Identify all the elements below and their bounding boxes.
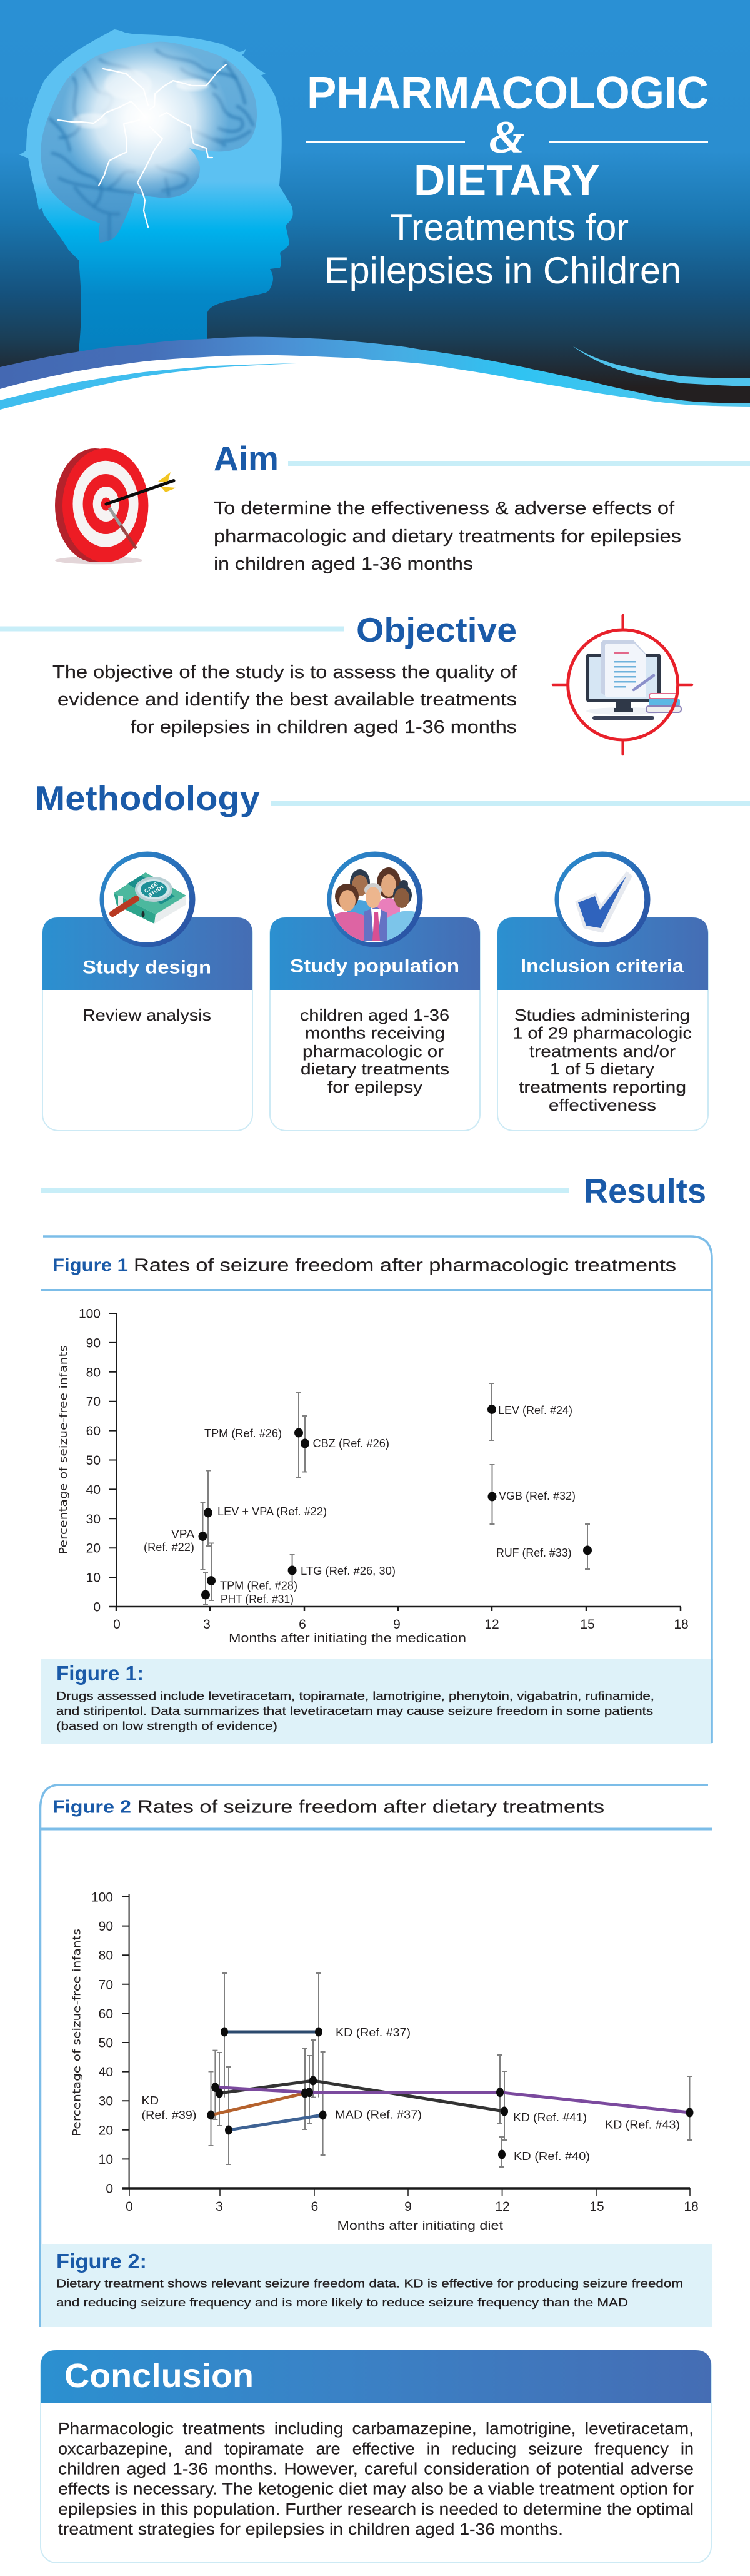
text: study population description: pharmacologic or — [302, 1042, 444, 1061]
panel: inclusion criteria card — [498, 852, 708, 1131]
chart: seizure freedom after dietary treatments: 15 — [589, 2200, 604, 2214]
title: DIETARY — [414, 156, 600, 205]
text: study population description: months receiving — [305, 1024, 445, 1043]
chart: seizure freedom after pharmacologic treatments: VGB (Ref. #32) — [499, 1490, 576, 1502]
chart: seizure freedom after pharmacologic treatments: 15 — [580, 1617, 595, 1632]
chart: seizure freedom after dietary treatments: Months after initiating diet — [338, 2220, 504, 2233]
chart: seizure freedom after dietary treatments: 6 — [311, 2200, 318, 2214]
chart: seizure freedom after dietary treatments: 0 — [106, 2181, 113, 2196]
callout: figure 2 summary — [41, 2244, 712, 2327]
callout: figure 1 summary: Drugs assessed include levetiracetam, topiramate, lamotrigine, phenytoin, vigabatrin, rufinamide, — [56, 1689, 654, 1702]
chart: seizure freedom after pharmacologic treatments: 10 — [86, 1571, 101, 1585]
text: objective description: The objective of the study is to assess the quality of — [52, 662, 518, 682]
text: study population description: for epilepsy — [328, 1078, 422, 1096]
icon: case study book and magnifier — [100, 852, 195, 947]
panel: figure 1 — [41, 1236, 713, 1744]
icon: lightning bolts — [58, 64, 226, 227]
panel: aim — [55, 439, 750, 574]
heading: figure 1 title: Figure 1 — [52, 1256, 128, 1276]
title: PHARMACOLOGIC — [307, 68, 709, 118]
text: inclusion criteria description: effectiveness — [549, 1096, 656, 1114]
chart: seizure freedom after pharmacologic treatments: 50 — [86, 1453, 101, 1468]
callout: figure 1 summary: Figure 1: — [56, 1662, 144, 1685]
chart: seizure freedom after dietary treatments: KD — [141, 2094, 159, 2107]
text: inclusion criteria description: 1 of 5 dietary — [550, 1059, 654, 1078]
text: inclusion criteria description: 1 of 29 pharmacologic — [512, 1024, 692, 1043]
panel: objective — [0, 610, 692, 754]
chart: seizure freedom after dietary treatments: 100 — [91, 1890, 113, 1905]
title: & — [489, 112, 525, 163]
header banner background — [0, 0, 750, 413]
icon: case study book and magnifier: STUDY — [147, 883, 166, 898]
icon: case study book and magnifier: CASE — [143, 881, 159, 894]
text: inclusion criteria description: treatments and/or — [529, 1042, 676, 1061]
text: objective description — [52, 662, 518, 737]
chart: seizure freedom after dietary treatments: KD (Ref. #40) — [514, 2150, 590, 2163]
panel: conclusion — [41, 2350, 711, 2563]
text: inclusion criteria description: treatments reporting — [519, 1078, 686, 1096]
chart: seizure freedom after dietary treatments: 10 — [99, 2153, 113, 2167]
chart: seizure freedom after dietary treatments: 80 — [99, 1949, 113, 1963]
chart: seizure freedom after pharmacologic treatments: Percentage of seizue-free infants — [58, 1345, 70, 1555]
text: conclusion body: oxcarbazepine, and topiramate are effective in reducing seizure frequency in — [58, 2440, 694, 2458]
chart: seizure freedom after pharmacologic treatments: PHT (Ref. #31) — [221, 1593, 294, 1605]
chart: seizure freedom after pharmacologic treatments: 12 — [484, 1617, 499, 1632]
chart: seizure freedom after dietary treatments: 60 — [99, 2007, 113, 2021]
text: aim description: pharmacologic and dietary treatments for epilepsies — [214, 527, 681, 547]
text: conclusion body: children aged 1-36 months. However, careful consideration of potential adverse — [58, 2460, 694, 2478]
text: study population description — [300, 1006, 449, 1096]
chart: seizure freedom after pharmacologic treatments: LEV (Ref. #24) — [498, 1404, 572, 1417]
text: conclusion body: effects is necessary. The ketogenic diet may also be a viable treatment option for — [58, 2481, 694, 2498]
chart: seizure freedom after dietary treatments — [71, 1890, 699, 2233]
title: Treatments for — [390, 206, 629, 248]
chart: seizure freedom after dietary treatments: 3 — [216, 2200, 223, 2214]
text: study population description: dietary treatments — [301, 1059, 449, 1078]
chart: seizure freedom after pharmacologic treatments: 60 — [86, 1424, 101, 1438]
chart: seizure freedom after pharmacologic treatments: TPM (Ref. #28) — [220, 1580, 298, 1592]
chart: seizure freedom after dietary treatments: 40 — [99, 2065, 113, 2079]
chart: seizure freedom after dietary treatments: Percentage of seizue-free infants — [71, 1929, 84, 2136]
heading: study population: Study population — [290, 956, 459, 977]
text: aim description: in children aged 1-36 months — [214, 554, 473, 574]
chart: seizure freedom after dietary treatments: 30 — [99, 2094, 113, 2109]
chart: seizure freedom after pharmacologic treatments: 18 — [674, 1617, 689, 1632]
chart: seizure freedom after dietary treatments: KD (Ref. #41) — [513, 2111, 587, 2124]
icon: group of people — [328, 852, 422, 947]
panel: figure 2 — [40, 1785, 712, 2327]
chart: seizure freedom after pharmacologic treatments: 70 — [86, 1395, 101, 1409]
icon: brain — [38, 34, 262, 247]
heading: results — [41, 1171, 706, 1210]
chart: seizure freedom after pharmacologic treatments: 100 — [79, 1307, 101, 1321]
title — [306, 68, 709, 291]
callout: figure 1 summary: (based on low strength of evidence) — [56, 1719, 278, 1732]
panel: study design card — [42, 852, 252, 1131]
chart: seizure freedom after dietary treatments: (Ref. #39) — [141, 2109, 196, 2121]
chart: seizure freedom after dietary treatments: 12 — [495, 2200, 510, 2214]
text: inclusion criteria description — [512, 1006, 692, 1114]
chart: seizure freedom after dietary treatments: 90 — [99, 1919, 113, 1934]
heading: methodology — [35, 779, 750, 817]
text: conclusion body: treatment strategies for epilepsies in children aged 1-36 months. — [58, 2521, 563, 2538]
callout: figure 1 summary — [41, 1659, 713, 1744]
text: objective description: for epilepsies in children aged 1-36 months — [131, 717, 517, 737]
heading: objective: Objective — [356, 610, 517, 649]
chart: seizure freedom after pharmacologic treatments: LTG (Ref. #26, 30) — [301, 1565, 396, 1577]
text: conclusion body: Pharmacologic treatments including carbamazepine, lamotrigine, levetiracetam, — [58, 2420, 694, 2438]
text: inclusion criteria description: Studies administering — [514, 1006, 690, 1024]
text: review analysis: Review analysis — [82, 1006, 211, 1024]
text: aim description: To determine the effectiveness & adverse effects of — [214, 498, 675, 518]
title: Epilepsies in Children — [324, 250, 681, 291]
icon: crosshair with monitor, document and books — [553, 615, 692, 754]
chart: seizure freedom after pharmacologic treatments: TPM (Ref. #26) — [204, 1427, 282, 1440]
heading: figure 2 title: Figure 2 — [52, 1797, 131, 1817]
icon: target with arrow — [55, 448, 176, 564]
heading: methodology: Methodology — [35, 779, 260, 817]
callout: figure 2 summary: Dietary treatment shows relevant seizure freedom data. KD is effective for producing seizure freedom — [56, 2276, 683, 2290]
chart: seizure freedom after pharmacologic treatments: 0 — [113, 1617, 121, 1632]
icon: check mark — [555, 852, 650, 947]
text: objective description: evidence and identify the best available treatments — [58, 690, 517, 710]
chart: seizure freedom after dietary treatments: 9 — [404, 2200, 412, 2214]
chart: seizure freedom after pharmacologic treatments: 80 — [86, 1365, 101, 1380]
heading: figure 2 title: Rates of seizure freedom after dietary treatments — [138, 1797, 604, 1817]
chart: seizure freedom after dietary treatments: 0 — [126, 2200, 133, 2214]
chart: seizure freedom after pharmacologic treatments: (Ref. #22) — [144, 1541, 194, 1553]
text: conclusion body — [58, 2420, 694, 2538]
chart: seizure freedom after pharmacologic treatments: 20 — [86, 1542, 101, 1556]
chart: seizure freedom after pharmacologic treatments: 9 — [393, 1617, 401, 1632]
chart: seizure freedom after dietary treatments: 18 — [684, 2200, 699, 2214]
heading: figure 1 title: Rates of seizure freedom after pharmacologic treatments — [134, 1256, 676, 1276]
chart: seizure freedom after dietary treatments: KD (Ref. #43) — [605, 2119, 680, 2131]
heading: study design: Study design — [82, 957, 211, 978]
heading: results: Results — [584, 1171, 706, 1210]
chart: seizure freedom after pharmacologic treatments: 0 — [93, 1600, 101, 1615]
chart: seizure freedom after pharmacologic treatments: 40 — [86, 1483, 101, 1497]
chart: seizure freedom after dietary treatments: 20 — [99, 2123, 113, 2138]
heading: inclusion criteria: Inclusion criteria — [521, 956, 684, 977]
callout: figure 1 summary: and stiripentol. Data summarizes that levetiracetam may cause seizure freedom in some patients — [56, 1704, 653, 1717]
chart: seizure freedom after dietary treatments: KD (Ref. #37) — [336, 2026, 411, 2039]
heading: aim: Aim — [214, 439, 279, 478]
chart: seizure freedom after pharmacologic treatments: VPA — [171, 1528, 194, 1540]
callout: figure 2 summary: and reducing seizure frequency and is more likely to reduce seizure frequency than the MAD — [56, 2296, 628, 2309]
text: study population description: children aged 1-36 — [300, 1006, 449, 1024]
panel: study population card — [270, 852, 480, 1131]
chart: seizure freedom after dietary treatments: MAD (Ref. #37) — [335, 2109, 422, 2121]
chart: seizure freedom after pharmacologic treatments: 6 — [299, 1617, 306, 1632]
chart: seizure freedom after pharmacologic treatments: 90 — [86, 1336, 101, 1350]
chart: seizure freedom after pharmacologic treatments: 3 — [203, 1617, 211, 1632]
chart: seizure freedom after pharmacologic treatments: CBZ (Ref. #26) — [312, 1437, 389, 1450]
icon: child head silhouette with brain — [19, 29, 293, 363]
chart: seizure freedom after pharmacologic treatments — [58, 1307, 689, 1645]
chart: seizure freedom after dietary treatments: 50 — [99, 2036, 113, 2050]
chart: seizure freedom after pharmacologic treatments: LEV + VPA (Ref. #22) — [218, 1505, 327, 1518]
chart: seizure freedom after pharmacologic treatments: 30 — [86, 1512, 101, 1527]
chart: seizure freedom after pharmacologic treatments: RUF (Ref. #33) — [496, 1547, 571, 1559]
chart: seizure freedom after dietary treatments: 70 — [99, 1977, 113, 1992]
chart: seizure freedom after pharmacologic treatments: Months after initiating the medication — [229, 1632, 466, 1645]
decorative wave — [0, 337, 750, 425]
callout: figure 2 summary: Figure 2: — [56, 2250, 147, 2273]
heading: conclusion: Conclusion — [64, 2357, 254, 2395]
text: conclusion body: epilepsies in this population. Further research is needed to determine the optimal — [58, 2501, 694, 2518]
text: aim description — [214, 498, 681, 574]
